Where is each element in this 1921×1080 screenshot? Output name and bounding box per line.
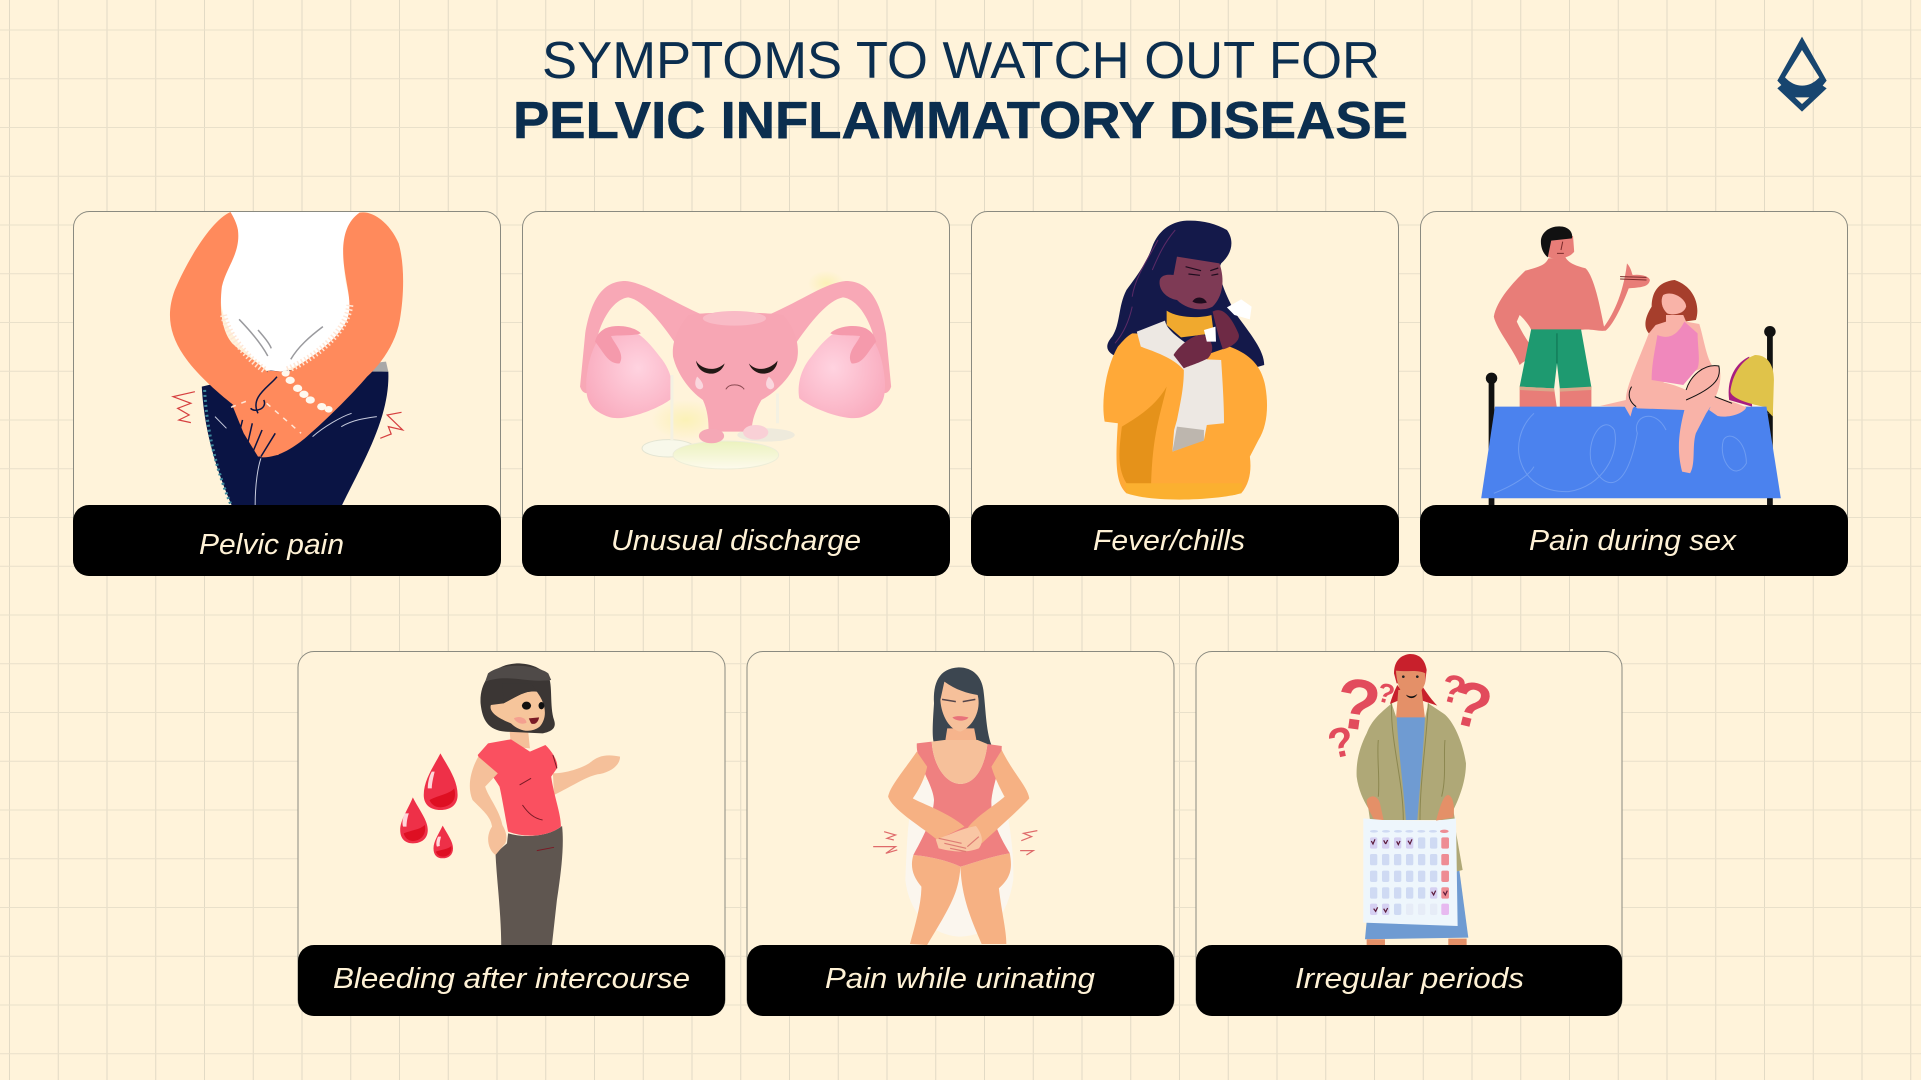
illustration: woman with blood drops (400, 663, 620, 947)
icon: logo (1777, 37, 1827, 112)
label bar: Irregular periods (1295, 963, 1524, 995)
label bar: Pelvic pain (199, 529, 344, 561)
label bar (73, 505, 501, 576)
label bar (747, 945, 1174, 1016)
question marks: ? (1444, 667, 1499, 744)
question marks: ? (1374, 676, 1398, 710)
illustration: couple at bed (1481, 226, 1781, 505)
illustration: sad uterus (580, 271, 891, 469)
title: PELVIC INFLAMMATORY DISEASE (513, 92, 1408, 150)
label bar (298, 945, 725, 1016)
label bar: Pain while urinating (825, 963, 1095, 995)
label bar (971, 505, 1399, 576)
panel: bleeding after intercourse (298, 652, 725, 1016)
panel: fever and chills (971, 212, 1399, 576)
panel: unusual discharge (522, 212, 950, 576)
title: SYMPTOMS TO WATCH OUT FOR (542, 32, 1380, 90)
panel: pelvic pain (73, 212, 501, 576)
calendar (1363, 818, 1458, 926)
label bar: Unusual discharge (611, 525, 861, 557)
question marks: ? (1436, 665, 1470, 714)
illustration: woman holding calendar (1323, 654, 1499, 945)
label bar: Pain during sex (1529, 525, 1738, 557)
illustration: woman on toilet (873, 667, 1037, 945)
icon: blood drops (400, 753, 458, 858)
label bar (522, 505, 950, 576)
question marks (1323, 663, 1499, 768)
panel: pain while urinating (747, 652, 1174, 1016)
title (513, 32, 1408, 150)
label bar: Fever/chills (1093, 525, 1245, 557)
illustration: hands over pelvis (170, 212, 403, 507)
label bar: Bleeding after intercourse (333, 963, 690, 995)
label bar (1196, 945, 1622, 1016)
question marks: ? (1331, 663, 1385, 748)
question marks: ? (1323, 717, 1358, 768)
illustration: woman with tissue and scarf (1103, 221, 1267, 500)
panel: irregular periods (1196, 652, 1622, 1016)
panel: pain during sex (1420, 212, 1848, 576)
label bar (1420, 505, 1848, 576)
